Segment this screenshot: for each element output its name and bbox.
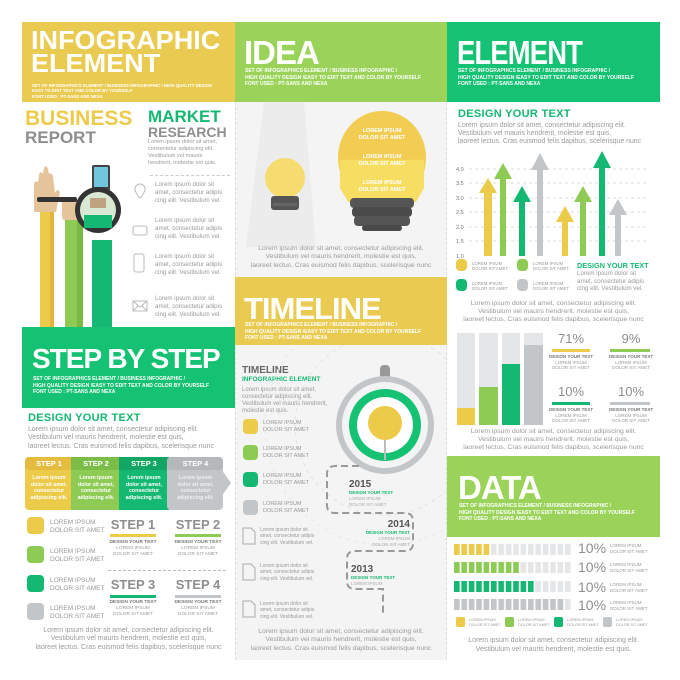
step grid: DOLOR SIT AMET — [113, 612, 153, 617]
step grid: DESIGN YOUR TEXT — [109, 600, 157, 605]
heading: business report: BUSINESS — [25, 107, 132, 130]
list: market research items: amet, consectetur adipis — [155, 303, 222, 310]
stats: data percentages: 10% — [578, 579, 606, 595]
subtitle — [245, 68, 421, 87]
legend: left colored squares: LOREM IPSUM — [50, 577, 96, 584]
text block: chart side note: cing elit. Vestibulum vel. — [577, 285, 643, 292]
text block: right middle paragraph — [463, 300, 644, 323]
steps bar: Lorem ipsum — [179, 475, 212, 481]
legend: timeline squares: LOREM IPSUM — [263, 446, 302, 452]
subtitle — [33, 376, 209, 395]
subtitle: SET OF INFOGRAPHICS ELEMENT / BUSINESS INFOGRAPHIC / — [458, 68, 610, 74]
subtitle: SET OF INFOGRAPHICS ELEMENT / BUSINESS INFOGRAPHIC / HIGH QUALITY DESIGN — [32, 83, 212, 88]
steps bar: consectetur — [180, 488, 211, 494]
step grid: LOREM IPSUM — [181, 546, 215, 551]
text block: idea paragraph: laoreet lectus. Cras euismod felis dapibus, scelerisque nunc — [251, 262, 431, 269]
stats: percentages: 10% — [558, 384, 584, 399]
list: market research items: cing elit. Vestibulum vel. — [155, 197, 221, 204]
text block: idea paragraph — [251, 245, 431, 269]
subtitle: HIGH QUALITY DESIGN /EASY TO EDIT TEXT AND COLOR BY YOURSELF — [245, 75, 421, 81]
legend: chart: DOLOR SIT AMET — [472, 286, 508, 291]
legend: data: LOREM IPSUM — [567, 618, 594, 622]
stats: percentages — [549, 331, 654, 423]
legend: data: LOREM IPSUM — [469, 618, 496, 622]
list: timeline document items: amet, consectetur adipis — [260, 533, 314, 539]
legend: timeline squares: DOLOR SIT AMET — [263, 427, 309, 433]
chart: vertical bars — [457, 333, 543, 425]
stats: percentages: DESIGN YOUR TEXT — [549, 354, 593, 359]
text block: right paragraph: Vestibulum vel mauris hendrerit, molestie est quis, — [458, 130, 611, 137]
text block: timeline intro: Lorem ipsum dolor sit amet, — [242, 387, 316, 393]
legend: chart: DOLOR SIT AMET — [533, 286, 569, 291]
step grid: LOREM IPSUM — [116, 606, 150, 611]
timeline graphic: DOLOR SIT AMET — [372, 542, 410, 547]
step grid: DESIGN YOUR TEXT — [174, 540, 222, 545]
stats: percentages: DOLOR SIT AMET — [612, 365, 650, 370]
heading: business report: REPORT — [25, 128, 96, 147]
stats: percentages: DESIGN YOUR TEXT — [609, 407, 653, 412]
legend: chart: LOREM IPSUM — [472, 261, 502, 266]
steps bar — [25, 457, 231, 510]
step grid: DOLOR SIT AMET — [178, 612, 218, 617]
steps bar: dolor sit amet, — [126, 482, 162, 488]
chart: arrow bar chart: 1.5 — [456, 239, 464, 245]
timeline graphic: 2015 — [349, 479, 372, 490]
legend: chart: LOREM IPSUM — [533, 281, 563, 286]
list: timeline document items: cing elit. Vestibulum vel. — [260, 614, 313, 620]
stats: data percentages: DOLOR SIT AMET — [610, 606, 648, 611]
legend: left colored squares — [27, 517, 104, 620]
legend: timeline squares: DOLOR SIT AMET — [263, 480, 309, 486]
text block: data footer: Lorem ipsum dolor sit amet, consectetur adipiscing elit. — [468, 637, 639, 644]
stats: percentages: 9% — [622, 331, 640, 346]
panel: idea header — [235, 22, 447, 102]
legend: chart: LOREM IPSUM — [533, 261, 563, 266]
legend: timeline squares: LOREM IPSUM — [263, 420, 302, 426]
list: market research items: cing elit. Vestibulum vel. — [155, 233, 221, 240]
legend: timeline squares — [243, 419, 309, 515]
stats: percentages: DESIGN YOUR TEXT — [549, 407, 593, 412]
illustration: light bulbs — [265, 111, 426, 231]
timeline graphic: DESIGN YOUR TEXT — [366, 530, 410, 535]
subtitle: SET OF INFOGRAPHICS ELEMENT / BUSINESS INFOGRAPHIC / — [33, 376, 185, 382]
illustration: light bulbs: LOREM IPSUM — [363, 180, 402, 186]
title: IDEA — [244, 34, 319, 71]
stats: percentages: DOLOR SIT AMET — [552, 418, 590, 423]
stats: data percentages: LOREM IPSUM — [610, 543, 642, 548]
step grid: LOREM IPSUM — [116, 546, 150, 551]
icon: chat — [132, 226, 148, 236]
heading: timeline infographic element — [242, 365, 320, 383]
stats: percentages: LOREM IPSUM — [615, 360, 647, 364]
text block: timeline intro: molestie est quis. — [242, 408, 288, 414]
title: STEP BY STEP — [32, 343, 220, 374]
middle column background — [235, 102, 447, 660]
list: market research items: amet, consectetur adipis — [155, 261, 222, 268]
text block: market research: Vestibulum vel mauris — [148, 153, 202, 159]
subtitle: SET OF INFOGRAPHICS ELEMENT / BUSINESS INFOGRAPHIC / — [245, 322, 397, 328]
text block: timeline intro — [242, 386, 327, 414]
text block: timeline intro: consectetur adipiscing elit. — [242, 394, 312, 400]
subtitle: HIGH QUALITY DESIGN /EASY TO EDIT TEXT AND COLOR BY YOURSELF — [245, 329, 421, 335]
text block: timeline intro: Vestibulum vel mauris hendrerit, — [242, 401, 327, 407]
illustration: light bulbs: LOREM IPSUM — [363, 128, 402, 134]
chart: arrow bar chart: 4.0 — [456, 167, 464, 173]
step grid: DOLOR SIT AMET — [178, 552, 218, 557]
list: market research items: Lorem ipsum dolor sit — [155, 217, 214, 224]
list: timeline document items: Lorem ipsum dolor sit — [260, 563, 308, 569]
text block: right paragraph — [458, 122, 641, 145]
subtitle — [245, 322, 421, 341]
list: timeline document items: Lorem ipsum dolor sit — [260, 601, 308, 607]
stats: percentages: DESIGN YOUR TEXT — [609, 354, 653, 359]
step grid: LOREM IPSUM — [181, 606, 215, 611]
text block: chart side note: amet, consectetur adipis — [577, 278, 644, 284]
text block: left paragraph: Vestibulum vel mauris hendrerit, molestie est quis, — [28, 434, 184, 441]
heading: design your text (right): DESIGN YOUR TEXT — [458, 108, 571, 120]
panel: timeline header — [235, 277, 447, 345]
legend: left colored squares: DOLOR SIT AMET — [50, 556, 104, 563]
timeline graphic: LOREM IPSUM — [349, 496, 381, 501]
heading: market research: RESEARCH — [148, 124, 227, 140]
steps bar: STEP 2 — [83, 459, 109, 468]
stats: data percentages: LOREM IPSUM — [610, 600, 642, 605]
steps bar: adipiscing elit. — [126, 495, 162, 501]
legend: chart: DOLOR SIT AMET — [472, 266, 508, 271]
step grid — [108, 517, 226, 617]
stats: data percentages: DOLOR SIT AMET — [610, 549, 648, 554]
subtitle: HIGH QUALITY DESIGN /EASY TO EDIT TEXT AND COLOR BY YOURSELF — [459, 510, 635, 516]
stats: percentages: LOREM IPSUM — [615, 412, 647, 418]
chart: segmented progress bars — [454, 544, 570, 610]
list: market research items: amet, consectetur adipis — [155, 225, 222, 232]
text block: right lower paragraph — [463, 428, 644, 451]
title: DATA — [458, 469, 541, 506]
list: market research items: cing elit. Vestibulum vel. — [155, 269, 221, 276]
text block: data footer — [447, 636, 660, 654]
subtitle — [459, 503, 635, 522]
stats: data percentages: DOLOR SIT AMET — [610, 568, 648, 573]
legend: data: DOLOR SIT AMET — [567, 623, 599, 627]
text block: left paragraph — [28, 426, 214, 450]
step grid: STEP 3 — [111, 577, 155, 592]
text block: market research: hendrerit, molestie est quis. — [148, 160, 216, 166]
legend: left colored squares: DOLOR SIT AMET — [50, 527, 104, 534]
heading: business report — [25, 107, 132, 147]
legend: timeline squares: LOREM IPSUM — [263, 501, 302, 507]
panel: infographic element header — [22, 22, 235, 102]
illustration: light bulbs: DOLOR SIT AMET — [359, 187, 406, 193]
legend: data: DOLOR SIT AMET — [469, 623, 501, 627]
steps bar: adipiscing elit. — [31, 495, 67, 501]
timeline graphic — [264, 345, 447, 613]
steps bar: Lorem ipsum — [79, 475, 113, 481]
panel: step by step header — [22, 327, 235, 408]
subtitle: FONT USED : PT-SANS AND NEXA — [33, 389, 115, 395]
list: market research items: Lorem ipsum dolor sit — [155, 295, 214, 302]
text block: timeline footer: laoreet lectus. Cras euismod felis dapibus, scelerisque nunc — [251, 645, 431, 652]
legend: data: LOREM IPSUM — [616, 618, 643, 622]
step grid: STEP 4 — [176, 577, 220, 592]
text block: left footer: Lorem ipsum dolor sit amet, consectetur adipiscing elit. — [43, 627, 214, 634]
icon: location pin — [134, 184, 146, 198]
subtitle — [458, 68, 634, 87]
text block: right lower paragraph: laoreet lectus. Cras euismod felis dapibus, scelerisque nunc — [463, 444, 644, 451]
title — [31, 25, 220, 78]
text block: market research: consectetur adipiscing elit. — [148, 146, 214, 152]
heading: timeline infographic element: INFOGRAPHIC ELEMENT — [242, 376, 320, 383]
text block: data footer: Vestibulum vel mauris hendrerit, molestie est quis. — [476, 646, 631, 653]
stats: data percentages: 10% — [578, 559, 606, 575]
steps bar: adipiscing elit. — [78, 495, 114, 501]
legend: left colored squares: LOREM IPSUM — [50, 519, 96, 526]
legend: chart — [456, 259, 569, 291]
list: market research items: amet, consectetur adipis — [155, 189, 222, 196]
steps bar: consectetur — [129, 488, 159, 494]
text block: right middle paragraph: Lorem ipsum dolor sit amet, consectetur adipiscing elit. — [471, 300, 636, 307]
step grid: DESIGN YOUR TEXT — [109, 540, 157, 545]
list: timeline document items: amet, consectetur adipis — [260, 607, 314, 613]
text block: idea paragraph: Vestibulum vel mauris hendrerit, molestie est quis, — [265, 253, 417, 260]
subtitle: HIGH QUALITY DESIGN /EASY TO EDIT TEXT AND COLOR BY YOURSELF — [33, 383, 209, 389]
legend: chart: LOREM IPSUM — [472, 281, 502, 286]
step grid: DESIGN YOUR TEXT — [174, 600, 222, 605]
subtitle — [32, 83, 212, 99]
timeline graphic: LOREM IPSUM — [351, 581, 383, 586]
panel: element header — [447, 22, 660, 102]
list: market research items: Lorem ipsum dolor sit — [155, 181, 214, 188]
illustration: hands — [34, 165, 121, 327]
legend: left colored squares: LOREM IPSUM — [50, 605, 96, 612]
text block: left paragraph: laoreet lectus. Cras euismod felis dapibus, scelerisque nunc — [28, 443, 214, 450]
timeline graphic: 2013 — [351, 564, 374, 575]
stats: data percentages: 10% — [578, 597, 606, 613]
heading: timeline infographic element: TIMELINE — [242, 365, 289, 376]
stats: data percentages: LOREM IPSUM — [610, 582, 642, 587]
stats: data percentages: LOREM IPSUM — [610, 562, 642, 567]
heading: market research — [148, 107, 227, 140]
legend: data: LOREM IPSUM — [518, 618, 545, 622]
text block: right middle paragraph: Vestibulum vel mauris hendrerit, molestie est quis, — [478, 308, 629, 315]
legend: left colored squares: DOLOR SIT AMET — [50, 585, 104, 592]
timeline graphic: DOLOR SIT AMET — [349, 502, 387, 507]
chart: arrow bar chart: 3.5 — [456, 181, 464, 187]
title: INFOGRAPHIC — [31, 25, 220, 55]
text block: timeline footer: Vestibulum vel mauris hendrerit, molestie est quis, — [265, 636, 417, 643]
subtitle: FONT USED : PT-SANS AND NEXA — [245, 335, 327, 341]
list: market research items: cing elit. Vestibulum vel. — [155, 311, 221, 318]
subtitle: FONT USED : PT-SANS AND NEXA — [32, 94, 103, 99]
title: TIMELINE — [244, 291, 381, 326]
stats: data percentages: 10% — [578, 540, 606, 556]
text block: right paragraph: Lorem ipsum dolor sit amet, consectetur adipiscing elit. — [458, 122, 626, 129]
steps bar: dolor sit amet, — [177, 482, 214, 488]
text block: chart side note: DESIGN YOUR TEXT — [577, 261, 649, 270]
text block: right paragraph: laoreet lectus. Cras euismod felis dapibus, scelerisque nunc — [458, 138, 641, 145]
legend: timeline squares: DOLOR SIT AMET — [263, 508, 309, 514]
legend: left colored squares: DOLOR SIT AMET — [50, 613, 104, 620]
list: market research items: Lorem ipsum dolor sit — [155, 253, 214, 260]
steps bar: adipiscing elit. — [177, 495, 214, 501]
illustration: light bulbs: DOLOR SIT AMET — [359, 135, 406, 141]
heading: design your text (left): DESIGN YOUR TEXT — [28, 412, 141, 424]
text block: right middle paragraph: laoreet lectus. Cras euismod felis dapibus, scelerisque nunc — [463, 316, 644, 323]
icon: phone — [134, 254, 144, 272]
step grid: STEP 2 — [176, 517, 220, 532]
legend: data: DOLOR SIT AMET — [518, 623, 550, 627]
step grid: DOLOR SIT AMET — [113, 552, 153, 557]
step grid: STEP 1 — [111, 517, 155, 532]
timeline graphic: 2014 — [388, 519, 410, 530]
text block: left paragraph: Lorem ipsum dolor sit amet, consectetur adipiscing elit. — [28, 426, 198, 433]
chart: arrow bar chart — [456, 151, 646, 260]
subtitle: SET OF INFOGRAPHICS ELEMENT / BUSINESS INFOGRAPHIC / — [459, 503, 611, 509]
chart: arrow bar chart: 2.0 — [456, 225, 464, 231]
text block: chart side note: Lorem ipsum dolor sit — [577, 270, 636, 277]
heading: market research: MARKET — [148, 107, 221, 126]
legend: timeline squares: LOREM IPSUM — [263, 473, 302, 479]
steps bar: Lorem ipsum — [127, 475, 161, 481]
text block: idea paragraph: Lorem ipsum dolor sit amet, consectetur adipiscing elit. — [258, 245, 424, 252]
text block: market research: Lorem ipsum dolor sit amet, — [148, 139, 217, 145]
stats: percentages: LOREM IPSUM — [555, 360, 587, 364]
stats: percentages: 10% — [618, 384, 644, 399]
stats: percentages: 71% — [558, 331, 584, 346]
list: timeline document items — [242, 527, 314, 620]
title: ELEMENT — [31, 48, 160, 78]
icon: mail — [132, 300, 148, 312]
legend: data — [456, 617, 648, 627]
text block: chart side note — [577, 261, 649, 292]
steps bar: consectetur — [34, 488, 64, 494]
steps bar: STEP 3 — [131, 459, 157, 468]
subtitle: HIGH QUALITY DESIGN /EASY TO EDIT TEXT AND COLOR BY YOURSELF — [458, 75, 634, 81]
stats: percentages: LOREM IPSUM — [555, 412, 587, 418]
list: timeline document items: amet, consectetur adipis — [260, 569, 314, 575]
text block: left footer: laoreet lectus. Cras euismod felis dapibus, scelerisque nunc — [36, 644, 222, 651]
text block: left footer — [36, 626, 222, 651]
text block: right lower paragraph: Vestibulum vel mauris hendrerit, molestie est quis, — [478, 436, 629, 443]
steps bar: dolor sit amet, — [31, 482, 67, 488]
text block: left footer: Vestibulum vel mauris hendrerit, molestie est quis, — [51, 635, 206, 642]
steps bar: STEP 1 — [36, 459, 62, 468]
steps bar: Lorem ipsum — [32, 475, 66, 481]
stats: data percentages: DOLOR SIT AMET — [610, 588, 648, 593]
text block: timeline footer — [251, 628, 431, 652]
legend: left colored squares: LOREM IPSUM — [50, 548, 96, 555]
timeline graphic: DESIGN YOUR TEXT — [351, 575, 395, 580]
panel: data header — [447, 456, 660, 537]
subtitle: FONT USED : PT-SANS AND NEXA — [458, 81, 540, 87]
list: timeline document items: cing elit. Vestibulum vel. — [260, 576, 313, 582]
illustration: light bulbs: DOLOR SIT AMET — [359, 161, 406, 167]
text block: market research — [148, 139, 217, 166]
subtitle: SET OF INFOGRAPHICS ELEMENT / BUSINESS INFOGRAPHIC / — [245, 68, 397, 74]
chart: arrow bar chart: 2.5 — [456, 210, 464, 216]
legend: data: DOLOR SIT AMET — [616, 623, 648, 627]
text block: right lower paragraph: Lorem ipsum dolor sit amet, consectetur adipiscing elit. — [471, 428, 636, 435]
stats: percentages: DOLOR SIT AMET — [612, 418, 650, 423]
list: timeline document items: Lorem ipsum dolor sit — [260, 527, 308, 533]
steps bar: dolor sit amet, — [78, 482, 114, 488]
timeline graphic: LOREM IPSUM — [378, 536, 410, 541]
steps bar: consectetur — [81, 488, 111, 494]
legend: timeline squares: DOLOR SIT AMET — [263, 453, 309, 459]
illustration: light bulbs: LOREM IPSUM — [363, 154, 402, 160]
stats: data percentages — [578, 540, 648, 613]
steps bar: STEP 4 — [183, 459, 208, 468]
list: timeline document items: cing elit. Vestibulum vel. — [260, 540, 313, 546]
subtitle: FONT USED : PT-SANS AND NEXA — [245, 81, 327, 87]
stats: percentages: DOLOR SIT AMET — [552, 365, 590, 370]
chart: arrow bar chart: 1.0 — [456, 254, 464, 260]
text block: timeline footer: Lorem ipsum dolor sit amet, consectetur adipiscing elit. — [258, 628, 424, 635]
list: market research items — [132, 175, 230, 318]
subtitle: FONT USED : PT-SANS AND NEXA — [459, 516, 541, 522]
legend: chart: DOLOR SIT AMET — [533, 266, 569, 271]
chart: arrow bar chart: 3.0 — [456, 196, 464, 202]
subtitle: EASY TO EDIT TEXT AND COLOR BY YOURSELF — [32, 88, 133, 93]
title: ELEMENT — [457, 34, 582, 71]
timeline graphic: DESIGN YOUR TEXT — [349, 490, 393, 495]
